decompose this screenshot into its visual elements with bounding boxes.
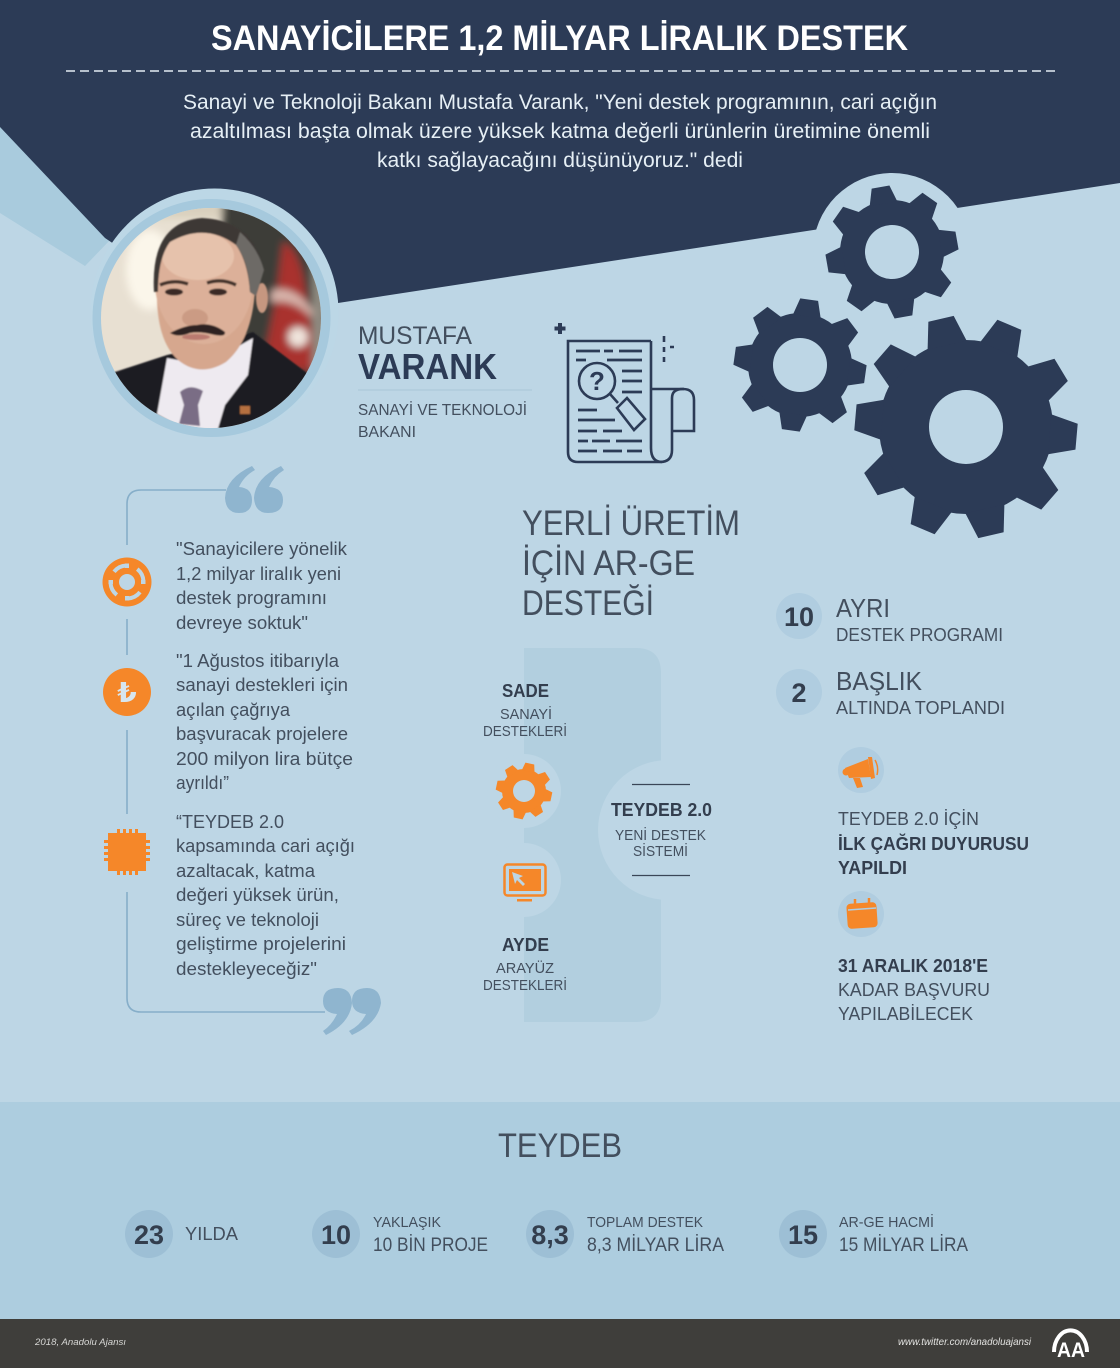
stat: 10 programs: 10 [784,602,814,632]
announcement text [838,809,1029,878]
stat: 10 thousand projects: 10 [321,1220,351,1250]
middle gear [733,298,867,432]
deadline text: KADAR BAŞVURU [838,980,990,1000]
AYDE label: DESTEKLERİ [483,976,567,994]
stat: 2 headings: ALTINDA TOPLANDI [836,698,1005,718]
intro text: azaltılması başta olmak üzere yüksek katma değerli ürünlerin üretimine önemli [190,120,930,143]
SADE label: SADE [502,681,549,701]
deadline text: YAPILABİLECEK [838,1004,973,1024]
SADE label: DESTEKLERİ [483,722,567,740]
stat: 10 thousand projects: 10 BİN PROJE [373,1235,488,1256]
quote 3: kapsamında cari açığı [176,836,355,856]
portrait photo [90,188,338,437]
quote 1: devreye soktuk" [176,613,308,633]
name block: MUSTAFA [358,322,472,350]
quote 3: azaltacak, katma [176,861,316,881]
quote 3: değeri yüksek ürün, [176,885,339,905]
stat: 10 programs [776,593,1003,645]
icon: chip [104,829,150,875]
deadline text [838,956,990,1024]
stat: 10 thousand projects: YAKLAŞIK [373,1214,441,1231]
deadline text: 31 ARALIK 2018'E [838,956,988,976]
intro text: Sanayi ve Teknoloji Bakanı Mustafa Varank, "Yeni destek programının, cari açığın [183,91,937,114]
icon: research document: ? [589,366,605,396]
stat: 2 headings: BAŞLIK [836,666,923,696]
stat: 15 billion: 15 [788,1220,818,1250]
stat: 23 years [125,1210,238,1258]
quote 3: “TEYDEB 2.0 [176,812,284,832]
stat: 15 billion: 15 MİLYAR LİRA [839,1235,968,1256]
gears [733,173,1078,540]
stat: 10 programs: DESTEK PROGRAMI [836,625,1003,645]
icon: monitor with cursor [504,864,546,902]
icon: lira coin [103,668,151,716]
TEYDEB 2.0 label [611,784,712,876]
icon: research document [554,323,694,462]
section heading [522,504,740,623]
icon: calendar [838,891,884,937]
closing quote mark [323,988,381,1035]
quote 2: başvuracak projelere [176,724,348,744]
announcement text: TEYDEB 2.0 İÇİN [838,809,979,829]
TEYDEB 2.0 label: SİSTEMİ [633,842,688,860]
quote 1 [176,539,348,633]
SADE label [483,681,567,740]
section heading: İÇİN AR-GE [522,544,695,583]
quote 3: geliştirme projelerini [176,934,346,954]
center support panel [487,648,738,1022]
AYDE label: ARAYÜZ [496,959,554,977]
footer credit: 2018, Anadolu Ajansı [34,1337,126,1348]
title: SANAYİCİLERE 1,2 MİLYAR LİRALIK DESTEK [211,19,908,58]
stat: 8.3 billion: 8,3 [531,1220,569,1250]
intro text: katkı sağlayacağını düşünüyoruz." dedi [377,149,743,172]
AYDE label [483,935,567,994]
icon: megaphone [838,747,884,793]
large gear [854,314,1078,540]
footer bar [0,1319,1120,1368]
name block: VARANK [358,346,497,387]
stat: 23 years: YILDA [185,1224,238,1244]
quote 1: 1,2 milyar liralık yeni [176,564,341,584]
stat: 10 thousand projects [312,1210,488,1258]
quote 3: süreç ve teknoloji [176,910,319,930]
icon: orange target ring [102,558,152,606]
quote 3: destekleyeceğiz" [176,959,317,979]
quote 2: ayrıldı” [176,773,229,793]
quote 2: "1 Ağustos itibarıyla [176,651,340,671]
icon: lira coin: ₺ [117,676,137,709]
stat: 2 headings [776,666,1005,718]
quote 1: destek programını [176,588,327,608]
light-blue wedge [0,127,110,266]
SADE label: SANAYİ [500,705,552,723]
stat: 2 headings: 2 [791,678,807,708]
quote 2: açılan çağrıya [176,700,291,720]
section heading: DESTEĞİ [522,584,654,623]
stat: 10 programs: AYRI [836,593,890,623]
opening quote mark [225,466,284,513]
top gear [813,173,971,331]
AYDE label: AYDE [502,935,549,955]
TEYDEB heading: TEYDEB [498,1127,622,1165]
name block: BAKANI [358,424,416,441]
stat: 8.3 billion: 8,3 MİLYAR LİRA [587,1235,724,1256]
quote 2: sanayi destekleri için [176,675,348,695]
footer link: www.twitter.com/anadoluajansi [898,1336,1032,1348]
logo: AA [1054,1330,1087,1362]
quote 2: 200 milyon lira bütçe [176,749,353,769]
name block [358,322,532,441]
stat: 8.3 billion: TOPLAM DESTEK [587,1214,703,1231]
icon: orange gear [495,762,553,820]
quote 2 [176,651,353,793]
TEYDEB band [0,1102,1120,1319]
stat: 15 billion [779,1210,968,1258]
quote frame [127,490,325,1012]
intro text [183,91,937,172]
stat: 8.3 billion [526,1210,724,1258]
TEYDEB 2.0 label: YENİ DESTEK [615,826,706,844]
stat: 15 billion: AR-GE HACMİ [839,1213,934,1231]
stat: 23 years: 23 [134,1220,164,1250]
name block: SANAYİ VE TEKNOLOJİ [358,400,527,419]
navy header band [0,0,1120,312]
announcement text: İLK ÇAĞRI DUYURUSU [838,833,1029,854]
TEYDEB 2.0 label: TEYDEB 2.0 [611,800,712,820]
announcement text: YAPILDI [838,858,907,878]
logo: AA: AA [1057,1339,1085,1362]
quote 3 [176,812,355,979]
section heading: YERLİ ÜRETİM [522,504,740,543]
quote 1: "Sanayicilere yönelik [176,539,348,559]
